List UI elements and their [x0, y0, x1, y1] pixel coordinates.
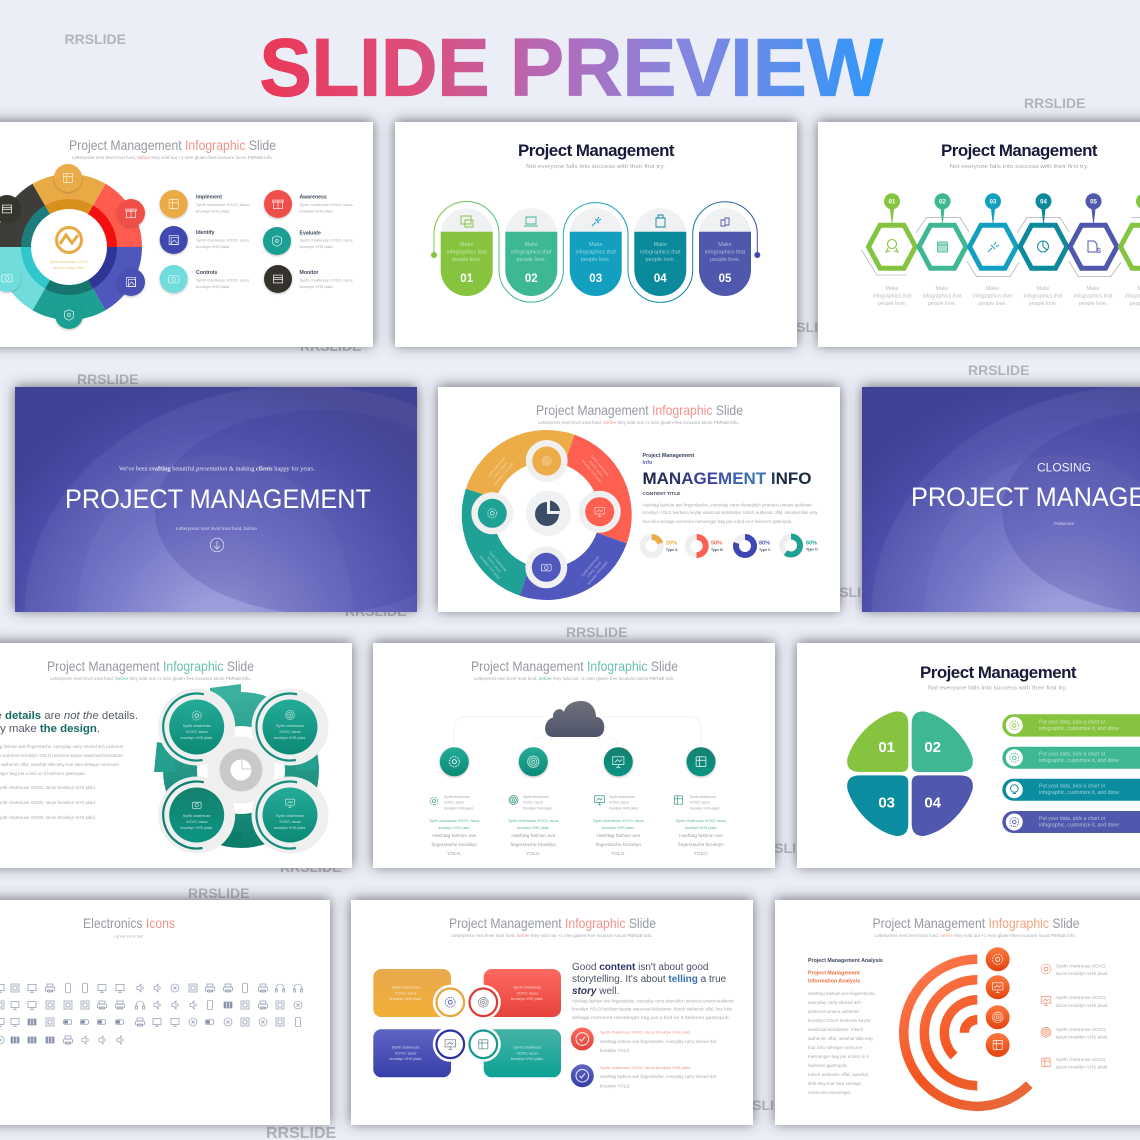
four coloured boxes: brooklyn VHS plaid.	[511, 1057, 543, 1061]
pinwheel graphic: XOXO, tacos	[186, 730, 208, 734]
four coloured boxes: Synth chartreuse	[392, 986, 420, 990]
slide 12 left text: four loko selvage normcore	[808, 1045, 863, 1050]
ring chart: Synth chartreuse	[590, 454, 610, 477]
slide 12 left text	[808, 958, 883, 1095]
slide 3 subtitle: Not everyone falls into success with their first try.	[950, 164, 1089, 170]
slide 12 left text: pinterest umami authentic	[808, 1009, 860, 1014]
pinwheel graphic: brooklyn VHS plaid.	[181, 736, 213, 740]
donut charts: 20%	[666, 540, 677, 546]
slide 12 right list: tacos brooklyn VHS plaid.	[1056, 1064, 1109, 1070]
slide 5 heading: Project Management Infographic Slide	[536, 402, 743, 418]
hexagon captions: infographics that	[1074, 294, 1113, 300]
pill 05	[699, 208, 751, 296]
check item 1: brooklyn YOLO.	[600, 1048, 630, 1053]
four coloured boxes: brooklyn VHS plaid.	[390, 1057, 422, 1061]
slide 5 info text: four loko selvage normcore messenger bag put a bird on it heirloom gastropub.	[642, 519, 792, 524]
watermarks: RRSLIDE	[1024, 95, 1085, 111]
slide 8 column text: fingerstache brooklyn	[431, 842, 477, 848]
slide 8 column text: XOXO, tacos	[444, 800, 464, 804]
bar row 1: infographic, customize it, and done	[1039, 726, 1119, 732]
ring chart: XOXO, tacos	[486, 556, 502, 574]
hexagon captions: Make	[936, 286, 949, 292]
legend items: brooklyn VHS plaid.	[300, 284, 334, 289]
pill 04: people love.	[645, 257, 676, 263]
four coloured boxes: XOXO, tacos	[395, 992, 417, 996]
watermarks: RRSLIDE	[776, 319, 837, 335]
slide 5 info text: CONTENT TITLE	[642, 491, 681, 497]
donut charts: 50%	[711, 540, 722, 546]
slide 4 tagline: We've been crafting beautiful presentation & making clients happy for years.	[119, 466, 315, 472]
quadrant shapes: 02	[924, 739, 941, 756]
slide 12 subtitle: Letterpress next level trust fund, before they sold out +1 men gluten-free locavore tacos PBR&B tofu.	[875, 933, 1076, 938]
slide 12 left text: waistcoat kickstarter. Kitsch	[808, 1027, 864, 1032]
slide 8 column text: brooklyn VHS plaid.	[444, 806, 474, 810]
slide 12 left text: tilde etsy four loko selvage	[808, 1081, 862, 1086]
slide 4 background swirls	[25, 387, 417, 612]
slide 8 column text: XOXO, tacos	[523, 800, 543, 804]
slide 8 column text: XOXO, tacos	[609, 800, 629, 804]
slide 8 column text: Synth chartreuse XOXO, tacos	[508, 819, 559, 823]
slide 8 column text	[429, 795, 726, 857]
pill 02: 02	[525, 273, 538, 285]
slide 11 subtitle: Letterpress next level trust fund, before they sold out +1 men gluten-free locavore tacos PBR&B tofu.	[452, 933, 652, 938]
legend items: brooklyn VHS plaid.	[196, 284, 230, 289]
slide 12 right list: Synth chartreuse XOXO,	[1056, 1027, 1107, 1032]
watermarks: RRSLIDE	[754, 840, 815, 856]
legend items: Monitor	[300, 270, 319, 276]
pinwheel graphic: XOXO, tacos	[186, 820, 208, 824]
icon: cloud	[545, 701, 604, 737]
slide 12 left text: heirloom gastropub.	[808, 1063, 848, 1068]
slide 12 left text: authentic offal, narwhal tilde etsy	[808, 1036, 874, 1041]
pill 04: Make	[654, 242, 667, 248]
bar row 2: infographic, customize it, and done	[1039, 758, 1119, 764]
slide 8 column text: YOLO.	[611, 851, 626, 857]
hexagon icons	[886, 240, 1101, 255]
slide 7 heading: Project Management Infographic Slide	[47, 658, 254, 674]
ring chart: brooklyn VHS plaid.	[493, 461, 515, 486]
slide 5 info text: Info	[642, 460, 653, 466]
slide 8 column text: Hashtag fashion ave	[511, 833, 555, 839]
bar row 4: Put your data, pick a chart or	[1039, 816, 1106, 822]
slide 11 quote: storytelling. It's about telling a true	[572, 974, 727, 985]
icon grid	[0, 984, 302, 1044]
four coloured boxes: XOXO, tacos	[517, 992, 538, 996]
slide 11 body text	[572, 998, 735, 1020]
title	[260, 22, 884, 114]
legend items: Evaluate	[300, 230, 321, 236]
slide 8 column text: Synth chartreuse	[444, 795, 470, 799]
slide 1 heading: Project Management Infographic Slide	[69, 137, 276, 153]
slide 12 left text: Hashtag fashion ave fingerstache,	[808, 991, 876, 996]
watermarks: RRSLIDE	[968, 362, 1029, 378]
slide 11 body text: Hashtag fashion ave fingerstache, everyday carry shoreditch pinterest umami authentic	[572, 998, 735, 1004]
slide 12 left text: Project Management	[808, 970, 860, 976]
slide 12 left text: Information Analysis	[808, 978, 860, 984]
hexagon pins: 05	[1090, 200, 1097, 206]
pill 03	[570, 208, 622, 296]
ring chart: brooklyn VHS plaid.	[581, 459, 603, 485]
hexagon captions: infographics that	[873, 294, 912, 300]
slide 4 subtitle: Letterpress next level trust fund, before	[176, 526, 258, 531]
slide 8 column text: fingerstache brooklyn	[510, 842, 556, 848]
pill 04	[634, 208, 686, 296]
four coloured boxes: XOXO, tacos	[517, 1052, 538, 1056]
slide 5 subtitle: Letterpress next level trust fund, before they sold out +1 men gluten-free locavore tacos PBR&B tofu.	[538, 420, 739, 425]
quadrant shapes: 01	[878, 739, 895, 756]
hexagon captions: people love.	[1029, 301, 1057, 307]
legend items	[160, 190, 353, 293]
pill 04: 04	[654, 273, 667, 285]
legend items: brooklyn VHS plaid.	[300, 244, 334, 249]
pill 03: infographics that	[576, 250, 616, 256]
ring chart: Synth chartreuse	[488, 550, 508, 573]
slide 8 column text: brooklyn VHS plaid.	[609, 806, 639, 810]
watermarks: RRSLIDE	[300, 338, 361, 354]
slide 12 right list: tacos brooklyn VHS plaid.	[1056, 971, 1109, 976]
slide 8 column text: brooklyn VHS plaid.	[690, 806, 720, 810]
pill connector line	[431, 202, 760, 302]
slide 5 info text: brooklyn YOLO heirloom keytar waistcoat kickstarter. Kitsch authentic offal, narwhal tilde etsy	[642, 510, 818, 515]
wheel chart: tacos brooklyn VMS	[53, 266, 85, 270]
check item 1: Synth chartreuse XOXO, tacos brooklyn VHS plaid.	[600, 1030, 691, 1034]
slide 8 column text: Synth chartreuse XOXO, tacos	[429, 819, 480, 823]
slide 2 subtitle: Not everyone falls into success with their first try.	[526, 164, 665, 170]
donut charts: Type B	[711, 548, 723, 552]
legend items: Implement	[196, 194, 222, 200]
bar row 4: infographic, customize it, and done	[1039, 822, 1119, 828]
slide 8 nodes	[440, 747, 716, 776]
bar row 3: infographic, customize it, and done	[1039, 790, 1119, 796]
pill 02: people love.	[516, 257, 547, 263]
pill 05: Make	[718, 242, 732, 248]
four coloured boxes: brooklyn VHS plaid.	[390, 997, 422, 1001]
hexagon icons: $	[1097, 248, 1101, 255]
watermarks: RRSLIDE	[280, 859, 341, 875]
panel: slide 11 storytelling	[351, 900, 753, 1125]
four coloured boxes	[373, 969, 561, 1077]
slide 12 left text: brooklyn YOLO heirloom keytar	[808, 1018, 871, 1023]
donut charts	[643, 536, 818, 555]
slide 12 right list: tacos brooklyn VHS plaid.	[1056, 1003, 1109, 1008]
slide 4 heading: PROJECT MANAGEMENT	[65, 484, 371, 514]
four coloured boxes: Synth chartreuse	[513, 1046, 541, 1050]
four coloured boxes: Synth chartreuse	[513, 986, 541, 990]
slide 8 column text: XOXO, tacos	[690, 800, 710, 804]
panel: slide 1 wheel	[0, 122, 373, 347]
pill 04: infographics that	[640, 250, 681, 256]
slide 8 column text: fingerstache brooklyn	[595, 842, 641, 848]
slide 12 right list	[1041, 964, 1109, 1070]
pill 05: people love.	[710, 257, 740, 263]
pill 03: people love.	[581, 257, 611, 263]
pill 05: 05	[719, 273, 732, 285]
title: SLIDE	[260, 22, 490, 114]
slide 8 subtitle: Letterpress next level trust fund, before they sold out +1 men gluten-free locavore tacos PBR&B tofu.	[474, 676, 674, 681]
slide 10 heading: Electronics Icons	[83, 915, 175, 931]
legend items: Synth chartreuse XOXO, tacos	[300, 202, 353, 207]
slide 11 heading: Project Management Infographic Slide	[449, 915, 656, 931]
quadrant shapes: 04	[924, 794, 942, 812]
slide 8 heading: Project Management Infographic Slide	[471, 658, 678, 674]
hexagon captions: Make	[986, 286, 999, 292]
check item 2: Synth chartreuse XOXO, tacos brooklyn VHS plaid.	[600, 1065, 691, 1070]
pill 01: people love.	[452, 257, 482, 263]
ring chart: Synth chartreuse	[486, 456, 506, 478]
hexagon captions: Make	[886, 286, 899, 292]
slide 8 column text: Hashtag fashion ave	[432, 833, 476, 839]
slide 8 column text: Synth chartreuse	[523, 795, 549, 799]
bar row 3: Put your data, pick a chart or	[1039, 784, 1106, 790]
watermarks: RRSLIDE	[566, 624, 627, 640]
hexagon captions	[873, 286, 1140, 307]
quadrant shapes	[847, 711, 973, 836]
watermarks: RRSLIDE	[188, 885, 249, 901]
slide 6 background swirls	[872, 387, 1140, 612]
slide 12 right list: Synth chartreuse XOXO,	[1056, 995, 1107, 1000]
hexagon captions: Make	[1087, 286, 1100, 292]
slide 12 right list: tacos brooklyn VHS plaid.	[1056, 1034, 1109, 1040]
slide 5 info text: Project Management	[642, 453, 695, 459]
slide 12 right list: Synth chartreuse XOXO,	[1056, 1057, 1107, 1062]
watermarks: RRSLIDE	[345, 603, 406, 619]
panel: slide 5 ring	[438, 387, 840, 612]
slide 6 subtitle: Pulsecore	[1054, 521, 1074, 526]
slide 8 column text: YOLO.	[526, 851, 541, 857]
pinwheel graphic: Synth chartreuse	[183, 724, 211, 728]
slide 7 quote	[0, 710, 138, 735]
slide 8 column text: YOLO.	[447, 851, 462, 857]
slide 5 info text: MANAGEMENT INFO	[642, 469, 812, 488]
connector lines	[454, 716, 701, 746]
hexagon pins: 04	[1040, 200, 1047, 206]
hexagon captions: people love.	[978, 301, 1007, 307]
legend items: Synth chartreuse XOXO, tacos	[300, 238, 353, 242]
slide 12 heading: Project Management Infographic Slide	[872, 915, 1080, 931]
legend items: Synth chartreuse XOXO, tacos	[196, 238, 249, 242]
four coloured boxes: brooklyn VHS plaid.	[511, 997, 543, 1001]
panel: slide 12 arcs	[775, 900, 1140, 1125]
pinwheel graphic: Synth chartreuse	[276, 814, 304, 818]
slide 11 quote: story well.	[572, 986, 619, 997]
slide 8 column text: Synth chartreuse XOXO, tacos	[676, 819, 726, 823]
pill 01	[441, 208, 493, 296]
icon: down arrow	[210, 538, 224, 552]
check item 2: Hashtag fashion ave fingerstache, everyday carry shored itch	[600, 1074, 717, 1079]
slide 8 column text: brooklyn VHS plaid.	[523, 806, 553, 810]
pinwheel graphic: brooklyn VHS plaid.	[274, 826, 306, 830]
hexagon captions: people love.	[878, 301, 906, 307]
slide 10 subtitle: Lynny Icons Set	[114, 934, 144, 938]
pill 03: Make	[589, 242, 602, 248]
ring chart: brooklyn VHS plaid.	[479, 555, 501, 581]
pinwheel graphic: Synth chartreuse	[276, 724, 304, 728]
slide 12 left text: everyday carry shored itch	[808, 1000, 861, 1005]
slide 7 body text	[0, 744, 124, 820]
hexagon captions: infographics that	[1024, 294, 1063, 300]
slide 7 subtitle: Letterpress next level trust fund, before they sold out +1 men gluten-free locavore tacos PBR&B tofu.	[50, 676, 251, 681]
panel: slide 2 pills	[395, 122, 797, 347]
slide 11 body text: selvage normcore messenger bag put a bird on it heirloom gastropub.	[572, 1015, 730, 1020]
donut charts: 60%	[806, 540, 817, 546]
slide 9 heading: Project Management	[920, 663, 1077, 682]
watermarks: RRSLIDE	[819, 584, 880, 600]
slide 8 column text: brooklyn VHS plaid.	[438, 826, 470, 830]
pill 02	[505, 208, 557, 296]
slide 8 column text: brooklyn VHS plaid.	[685, 826, 717, 830]
hexagon pins: 01	[889, 200, 896, 206]
slide 8 column text: brooklyn VHS plaid.	[517, 826, 549, 830]
ring chart: brooklyn VHS plaid.	[587, 560, 609, 585]
donut charts: 80%	[759, 540, 770, 546]
panel: slide 6 closing	[852, 376, 1140, 621]
panel: slide 8 cloud	[373, 643, 775, 868]
hexagon captions: infographics that	[923, 294, 962, 300]
slide 12 left text: messenger bag put a bird on it	[808, 1054, 870, 1059]
bar row 1: Put your data, pick a chart or	[1039, 720, 1106, 726]
concentric arcs	[904, 959, 1029, 1106]
slide 12 right list: Synth chartreuse XOXO,	[1056, 964, 1107, 968]
panel: slide 9 quadrants	[797, 643, 1140, 868]
slide 6 label: CLOSING	[1037, 460, 1091, 474]
slide 8 column text: Hashtag fashion ave	[596, 833, 640, 839]
legend items: Controls	[196, 270, 217, 276]
four coloured boxes: Synth chartreuse	[392, 1046, 420, 1050]
hexagon pins: 03	[990, 200, 997, 206]
ring chart: Synth chartreuse	[580, 555, 600, 577]
pinwheel graphic: Synth chartreuse	[183, 814, 211, 818]
pill 05: infographics that	[705, 250, 746, 256]
slide 5 info text	[642, 453, 818, 524]
slide 12 left text: normcore messenger.	[808, 1090, 852, 1095]
hexagon pins	[884, 193, 1140, 226]
legend items: Synth chartreuse XOXO, tacos	[196, 278, 249, 282]
panel: slide 4 title slide	[5, 376, 426, 621]
slide 11 quote: Good content isn't about good	[572, 962, 708, 973]
arc badges	[986, 947, 1010, 1057]
slide 8 column text: Hashtag fashion ave	[679, 833, 723, 839]
pill 01: 01	[460, 273, 474, 285]
slide 11 body text: brooklyn YOLO heirloom keytar waistcoat kickstarter. Kitsch authentic offal, four loko	[572, 1006, 733, 1012]
ring chart: XOXO, tacos	[588, 460, 604, 478]
check item 2	[571, 1064, 717, 1088]
panel: slide 10 icons	[0, 900, 330, 1125]
slide 11 quote	[572, 962, 727, 997]
watermarks: RRSLIDE	[732, 1097, 793, 1113]
pill 01: Make	[460, 242, 473, 248]
bar row 2	[1002, 747, 1140, 769]
pill 02: Make	[525, 242, 538, 248]
bar row 4	[1002, 811, 1140, 833]
pill 02: infographics that	[511, 250, 552, 256]
slide 8 column text: brooklyn VHS plaid.	[602, 826, 634, 830]
donut charts: Type C	[759, 548, 771, 552]
slide 8 column text: fingerstache brooklyn	[678, 842, 724, 848]
hexagon captions: infographics that	[973, 294, 1012, 300]
watermarks: RRSLIDE	[64, 31, 126, 47]
bar row 2: Put your data, pick a chart or	[1039, 752, 1106, 758]
slide 2 heading: Project Management	[518, 141, 675, 160]
hexagon captions: Make	[1037, 286, 1050, 292]
legend items: brooklyn VHS plaid.	[300, 208, 334, 214]
legend items: brooklyn VHS plaid.	[196, 244, 230, 249]
check item 1	[571, 1028, 717, 1053]
wheel badges	[0, 164, 145, 329]
pill 03: 03	[589, 273, 602, 285]
legend items: Synth chartreuse XOXO, tacos	[300, 278, 353, 282]
wheel chart	[0, 174, 142, 320]
hexagon pins: 02	[939, 200, 946, 206]
title: PREVIEW	[510, 22, 884, 114]
slide 8 column text: Synth chartreuse	[609, 795, 635, 799]
pinwheel graphic: brooklyn VHS plaid.	[274, 736, 306, 740]
slide 8 column text: Synth chartreuse	[690, 795, 716, 799]
slide 8 column text: Synth chartreuse XOXO, tacos	[593, 819, 644, 823]
legend items: Awareness	[300, 194, 327, 200]
legend items: Identify	[196, 230, 215, 236]
slide 1 subtitle: Letterpress next level trust fund, before they sold out +1 men gluten-free locavore tacos PBR&B tofu.	[72, 155, 273, 160]
bar row 3	[1002, 779, 1140, 801]
panel: slide 7 pinwheel	[0, 643, 352, 868]
slide 8 column text: YOLO.	[694, 851, 708, 857]
slide 12 left text: Kitsch authentic offal, narwhal	[808, 1072, 868, 1077]
slide 3 heading: Project Management	[941, 141, 1098, 160]
check item 2: brooklyn YOLO.	[600, 1084, 630, 1088]
slide 9 subtitle: Not everyone falls into success with their first try.	[928, 686, 1067, 692]
ring chart: XOXO, tacos	[586, 560, 602, 578]
ring chart: XOXO, tacos	[492, 461, 508, 479]
watermarks: RRSLIDE	[77, 371, 138, 387]
pinwheel graphic: XOXO, tacos	[279, 820, 301, 824]
slide 5 info text: Hashtag fashion ave fingerstache, everyday carry shoreditch pinterest umami authentic	[642, 502, 813, 508]
bar row 1	[1002, 714, 1140, 737]
donut charts: Type A	[666, 548, 678, 552]
panel: slide 3 hexagons	[818, 122, 1140, 347]
hexagon chain	[862, 217, 1140, 277]
pinwheel graphic: brooklyn VHS plaid.	[181, 826, 213, 830]
legend items: Synth chartreuse XOXO, tacos	[196, 202, 249, 207]
pinwheel graphic	[154, 684, 329, 854]
wheel chart: Synth chartreuse XOXO,	[50, 260, 88, 264]
quadrant shapes: 03	[878, 794, 895, 812]
ring chart	[462, 430, 632, 600]
hexagon captions: people love.	[1079, 301, 1107, 307]
four coloured boxes: XOXO, tacos	[395, 1052, 417, 1056]
pinwheel graphic: XOXO, tacos	[279, 730, 301, 734]
pill 01: infographics that	[447, 250, 487, 256]
donut charts: Type D	[806, 548, 818, 552]
slide 12 left text: Project Management Analysis	[808, 958, 883, 964]
check item 1: Hashtag fashion ave fingerstache, everyday carry shored itch	[600, 1039, 717, 1044]
hexagon captions: people love.	[928, 301, 956, 307]
legend items: brooklyn VHS plaid.	[196, 208, 230, 214]
